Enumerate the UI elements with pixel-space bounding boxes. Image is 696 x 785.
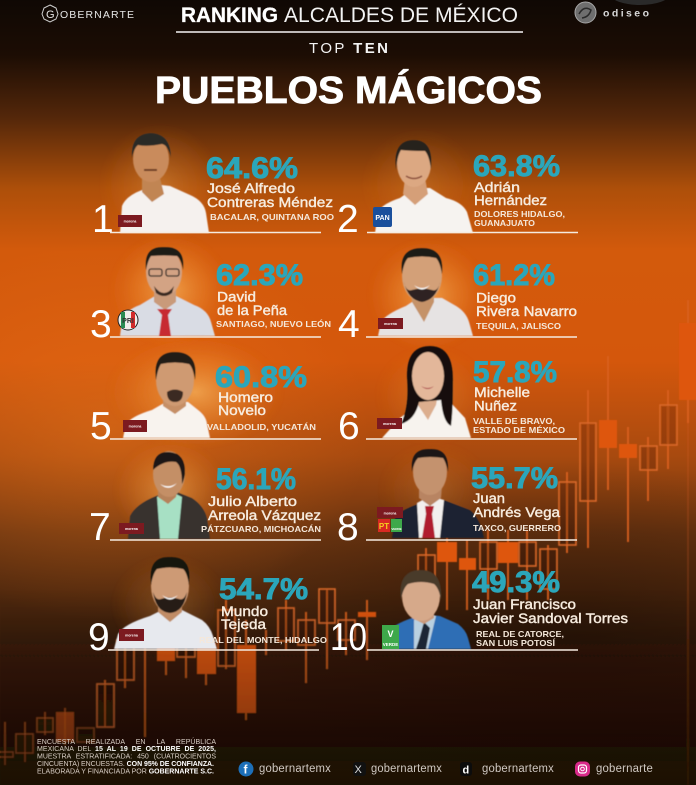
candidate 9 — [88, 553, 327, 659]
subtitle: Top Ten: TOP TEN — [309, 40, 388, 57]
social: Facebook — [238, 762, 331, 776]
heading: Pueblos Mágicos: PUEBLOS MÁGICOS — [155, 68, 542, 112]
name — [217, 290, 288, 318]
percentage: 60.8% — [215, 361, 307, 394]
percentage: 61.2% — [473, 259, 555, 292]
party badge: Morena — [119, 523, 144, 534]
percentage: 54.7% — [219, 573, 308, 606]
party badge: PRI: PRI — [122, 318, 134, 325]
municipality: SANTIAGO, NUEVO LEÓN — [216, 318, 331, 329]
percentage: 64.6% — [206, 152, 298, 185]
name — [473, 491, 561, 520]
photo: Juan Francisco Javier Sandoval Torres — [384, 570, 471, 649]
municipality: TEQUILA, JALISCO — [476, 321, 561, 331]
percentage: 57.8% — [473, 356, 557, 389]
candidate 10 — [330, 566, 628, 659]
logo: Gobernarte: G — [46, 9, 55, 21]
party badge: Morena — [378, 318, 403, 329]
title: Ranking alcaldes de México: RANKING — [181, 4, 278, 27]
party badge: Morena — [377, 418, 402, 429]
name: Andrés Vega — [473, 505, 561, 520]
party badge: Verde — [382, 625, 399, 649]
name: David — [217, 290, 256, 304]
rank number: 3 — [90, 303, 112, 346]
social: TikTok: d — [462, 764, 469, 776]
candlestick chart background — [0, 300, 696, 785]
name — [207, 181, 333, 210]
name: Javier Sandoval Torres — [473, 611, 628, 626]
municipality: VALLADOLID, YUCATÁN — [207, 422, 316, 432]
name: Homero — [218, 390, 273, 405]
logo: Odiseo: odiseo — [603, 8, 649, 20]
municipality: BACALAR, QUINTANA ROO — [210, 212, 334, 222]
candidate 2 — [337, 127, 578, 243]
name: Mundo — [221, 604, 268, 619]
underline — [366, 539, 577, 541]
municipality: REAL DE CATORCE, — [476, 629, 564, 639]
party badge: Morena: morena — [125, 527, 138, 531]
candidate 5 — [90, 334, 321, 450]
party badges: Morena, PT, Verde — [377, 507, 403, 532]
title: Ranking alcaldes de México — [176, 4, 523, 32]
social: Instagram — [575, 762, 653, 776]
candidate 6 — [338, 343, 577, 448]
party badge: Verde: VERDE — [383, 642, 398, 647]
name: Juan Francisco — [473, 597, 576, 612]
survey methodology note: MEXICANA DEL 15 AL 19 DE OCTUBRE DE 2025, — [37, 746, 216, 753]
name: Diego — [476, 290, 516, 306]
underline — [366, 438, 577, 440]
municipality: DOLORES HIDALGO, — [474, 209, 565, 219]
municipality — [474, 209, 565, 228]
percentage: 49.3% — [472, 566, 560, 599]
photo: José Alfredo Contreras Méndez — [98, 123, 222, 247]
social: TikTok: gobernartemx — [482, 763, 554, 775]
name: Contreras Méndez — [207, 195, 333, 210]
party badges: Morena, PT, Verde: PT — [379, 522, 389, 531]
photo: David de la Peña — [108, 232, 232, 348]
candidate 7 — [89, 438, 321, 549]
photo: Mundo Tejeda — [110, 553, 230, 657]
social: X — [353, 762, 442, 776]
photo: Adrián Hernández — [360, 127, 480, 243]
name: Juan — [473, 491, 505, 506]
municipality: VALLE DE BRAVO, — [473, 416, 555, 426]
survey methodology note: MUESTRA ESTRATIFICADA: 450 (CUATROCIENTOS — [37, 754, 216, 760]
municipality — [473, 416, 565, 435]
rank number: 5 — [90, 405, 112, 448]
logo: Odiseo — [575, 2, 649, 23]
name — [476, 290, 577, 319]
underline — [108, 649, 319, 651]
underline — [110, 336, 321, 338]
rank number: 6 — [338, 405, 360, 448]
party badge: Morena: morena — [124, 220, 136, 224]
social: Facebook: gobernartemx — [259, 763, 331, 775]
name: Rivera Navarro — [476, 304, 577, 319]
photo: Juan Andrés Vega — [377, 440, 493, 540]
municipality: GUANAJUATO — [474, 218, 535, 228]
rank number: 7 — [89, 506, 111, 549]
party badge: Morena — [119, 629, 144, 641]
party badge: Morena: morena — [129, 424, 141, 428]
name: Novelo — [218, 403, 266, 418]
percentage: 62.3% — [216, 259, 303, 292]
municipality: SAN LUIS POTOSÍ — [476, 638, 556, 648]
social: TikTok — [460, 762, 554, 776]
municipality — [476, 629, 564, 648]
name — [218, 390, 273, 418]
photo: Homero Novelo — [105, 334, 285, 450]
social: Instagram: gobernarte — [596, 763, 653, 775]
party badge: Morena: morena — [125, 634, 138, 638]
social: X: X — [354, 764, 362, 776]
candidate 4 — [338, 237, 577, 353]
name: Tejeda — [221, 617, 267, 632]
party badge: Verde: V — [387, 629, 394, 639]
party badge: PAN: PAN — [375, 215, 390, 222]
party badge: Morena — [123, 420, 147, 432]
rank number: 2 — [337, 198, 359, 241]
party badges: Morena, PT, Verde: VERDE — [391, 527, 402, 531]
name: Julio Alberto — [208, 494, 297, 509]
underline — [366, 336, 577, 338]
party badge: Morena — [118, 215, 142, 227]
name — [473, 597, 628, 626]
underline — [110, 438, 321, 440]
social: Facebook: f — [244, 762, 248, 776]
underline — [367, 649, 578, 651]
name: Adrián — [474, 180, 520, 195]
municipality: TAXCO, GUERRERO — [473, 523, 561, 533]
survey methodology note: CINCUENTA) ENCUESTAS. CON 95% DE CONFIANZA. — [37, 761, 214, 768]
logo: Gobernarte — [42, 5, 134, 22]
photo: Diego Rivera Navarro — [366, 237, 490, 353]
name — [474, 385, 530, 414]
name: José Alfredo — [207, 181, 295, 196]
underline — [110, 539, 321, 541]
party badge: PRI — [118, 310, 138, 330]
rank number: 9 — [88, 616, 110, 659]
name — [474, 180, 547, 208]
rank number: 10 — [330, 616, 367, 659]
party badges: Morena, PT, Verde: morena — [384, 512, 396, 516]
municipality: PÁTZCUARO, MICHOACÁN — [201, 524, 321, 534]
municipality: REAL DEL MONTE, HIDALGO — [199, 635, 327, 645]
party badge: Morena: morena — [383, 422, 396, 426]
candidate 8 — [337, 440, 577, 549]
name — [208, 494, 321, 523]
name: Nuñez — [474, 398, 517, 414]
underline — [110, 232, 321, 234]
rank number: 4 — [338, 303, 360, 346]
title: Ranking alcaldes de México: ALCALDES DE MÉXICO — [284, 4, 518, 27]
party badge: PAN — [373, 207, 392, 227]
social: X: gobernartemx — [371, 763, 442, 775]
name: Arreola Vázquez — [208, 508, 321, 523]
percentage: 56.1% — [216, 463, 296, 496]
name: Hernández — [474, 193, 547, 208]
underline — [367, 232, 578, 234]
rank number: 8 — [337, 506, 359, 549]
survey methodology note: ENCUESTA REALIZADA EN LA REPÚBLICA — [37, 737, 216, 746]
municipality: ESTADO DE MÉXICO — [473, 425, 565, 435]
percentage: 63.8% — [473, 150, 560, 183]
candidate 3 — [90, 232, 331, 348]
party badge: Morena: morena — [384, 322, 397, 326]
survey methodology note: ELABORADA Y FINANCIADA POR GOBERNARTE S.C. — [37, 768, 214, 776]
name — [221, 604, 268, 632]
logo: Gobernarte: OBERNARTE — [60, 9, 134, 21]
survey methodology note — [37, 737, 216, 776]
photo: Julio Alberto Arreola Vázquez — [112, 438, 228, 542]
photo: Michelle Nuñez — [374, 343, 490, 447]
candidate 1 — [92, 123, 334, 247]
name: de la Peña — [217, 303, 288, 318]
percentage: 55.7% — [471, 462, 558, 495]
name: Michelle — [474, 385, 530, 400]
rank number: 1 — [92, 198, 114, 241]
